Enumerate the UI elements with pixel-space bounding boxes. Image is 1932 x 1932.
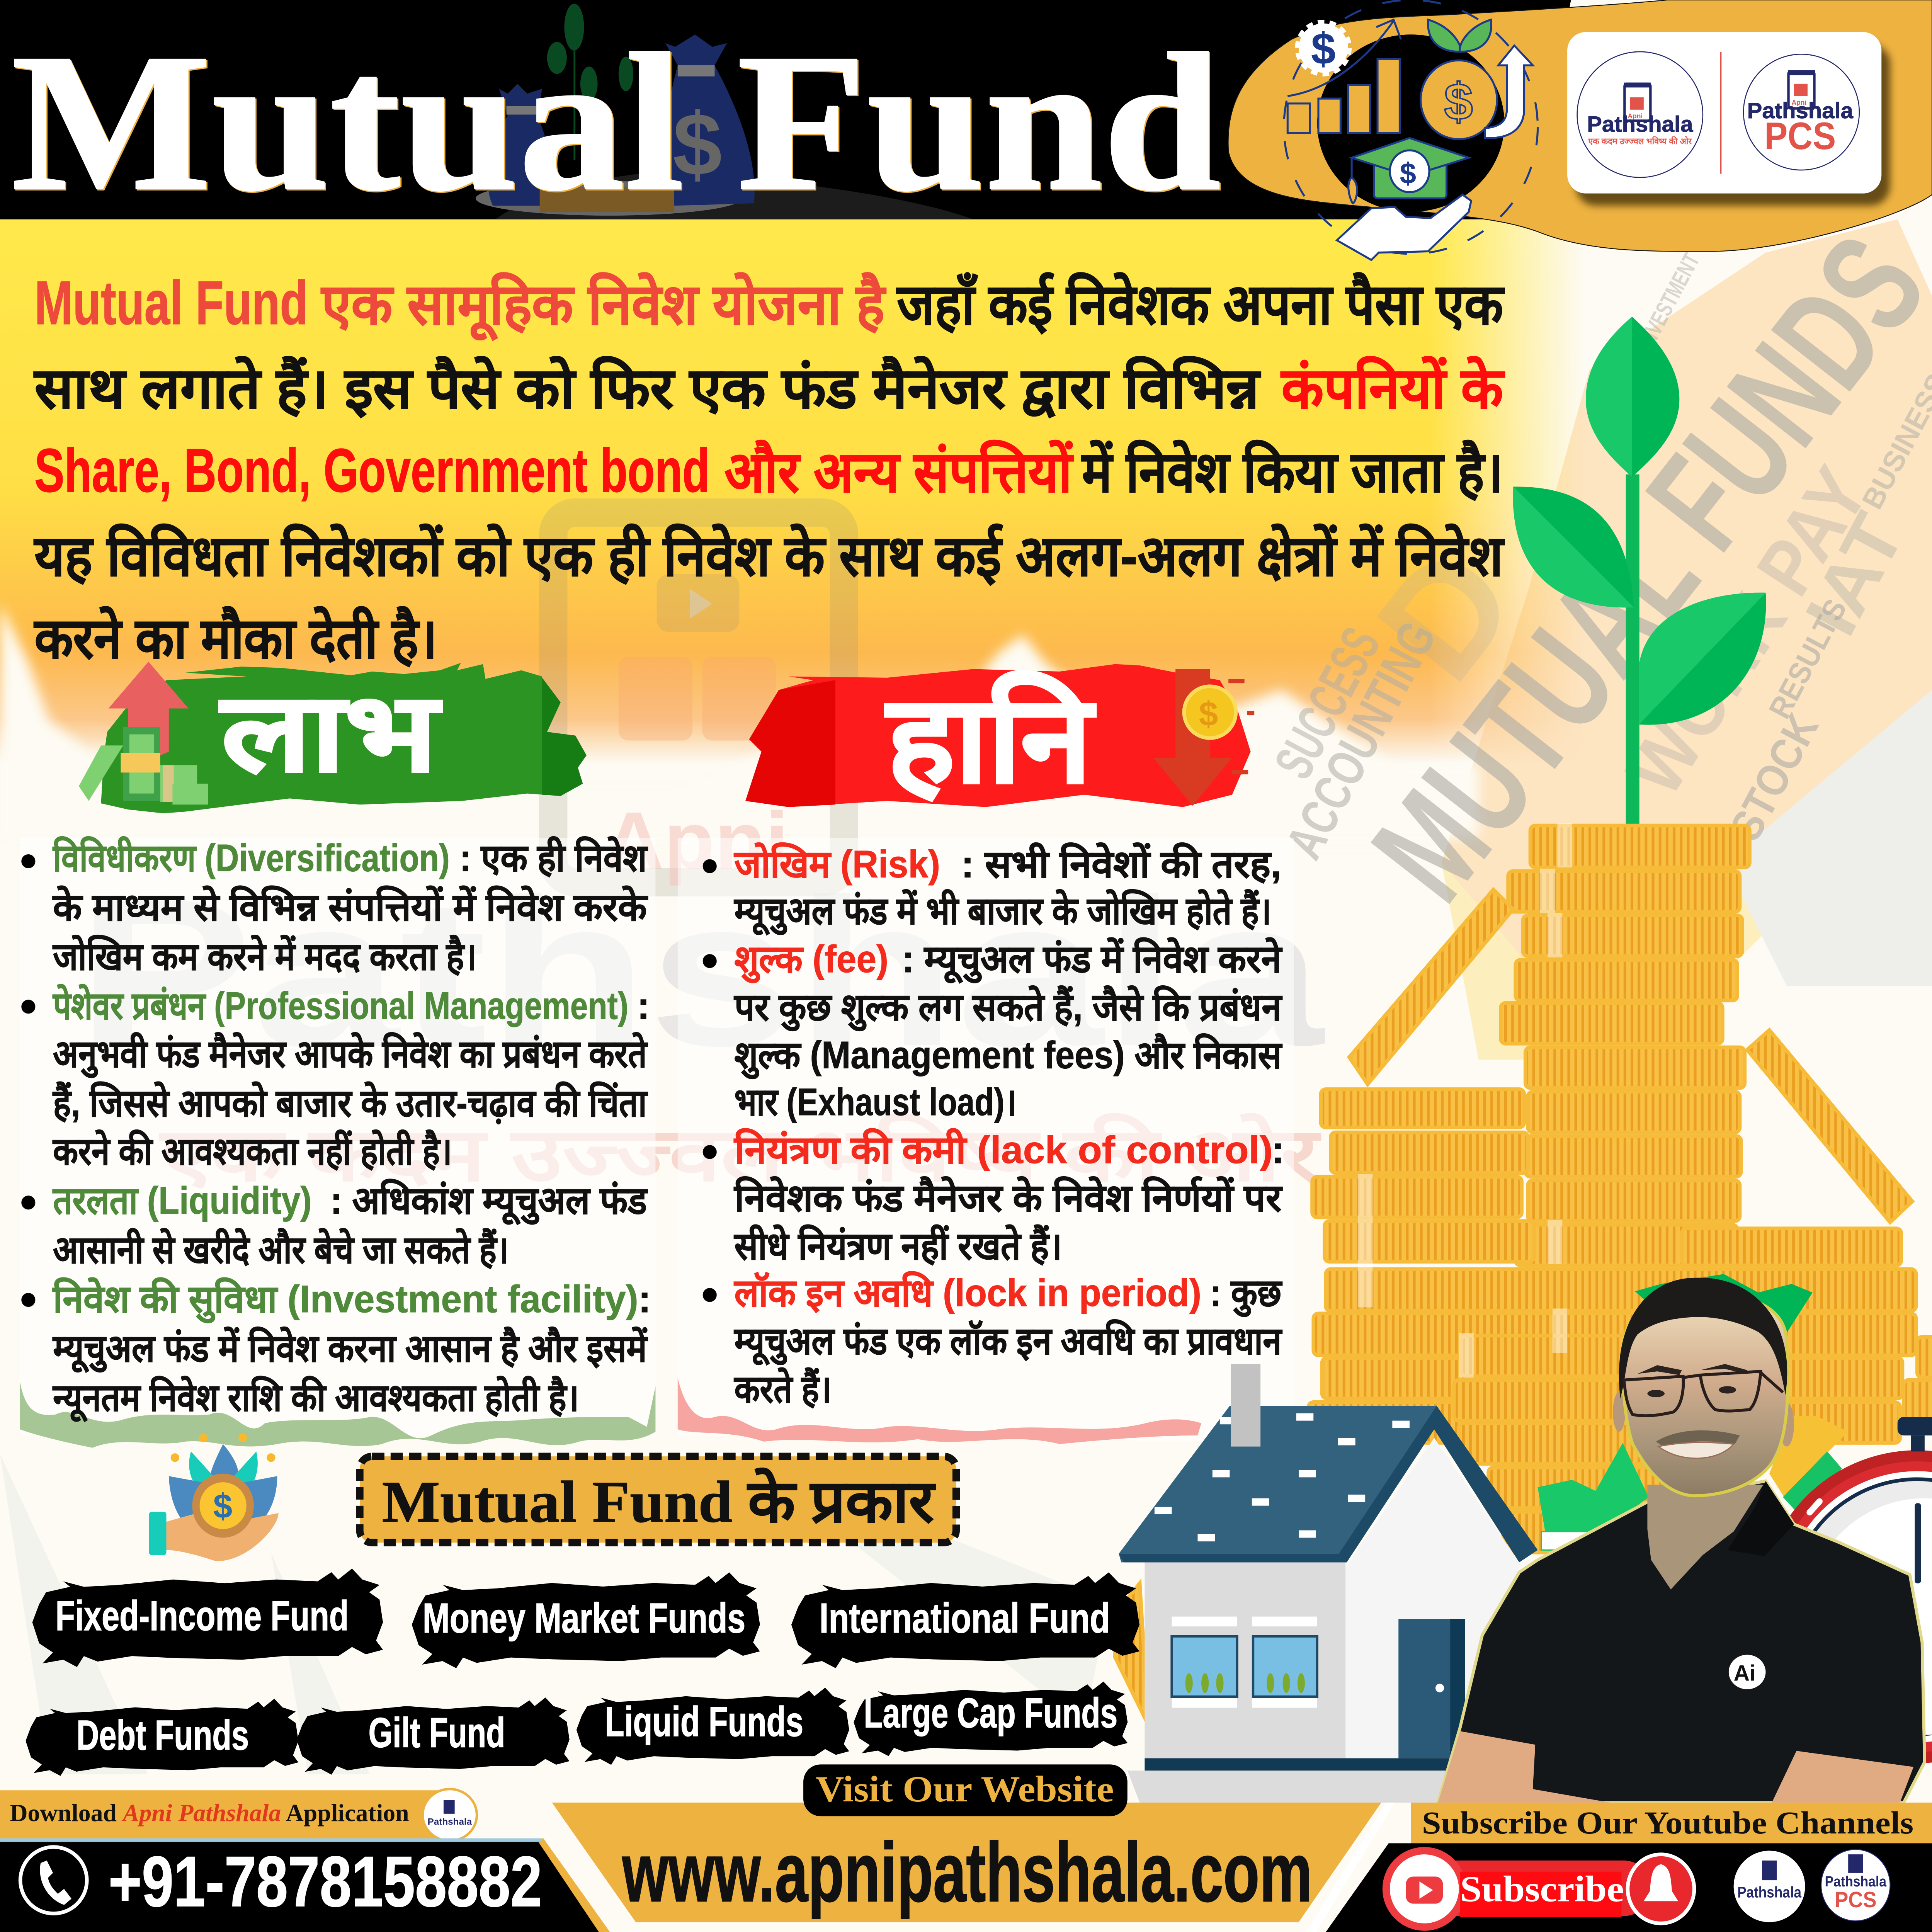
arrow [109,662,189,770]
ears [1613,1392,1794,1447]
gold header blob [1228,0,1932,252]
list: disadvantages: नियंत्रण की कमी (lack of control) [733,1128,1273,1171]
list: disadvantages: भार (Exhaust load)। [735,1081,1017,1123]
list: disadvantages: म्यूचुअल फंड में भी बाजार के जोखिम होते हैं। [734,889,1272,936]
wall [1145,1562,1345,1760]
panel: disadvantages [678,664,1294,1444]
list: disadvantages: लॉक इन अवधि (lock in period) [734,1271,1201,1314]
panel: advantages [20,662,655,1448]
icon: dashed circle [1284,0,1538,254]
logo: Pathshala PCS: PCS [1764,115,1836,157]
leaning coin stack: left [1349,889,1513,1084]
glasses [1624,1371,1783,1416]
icon: bell [1628,1854,1694,1923]
tag: Liquid Funds: Liquid Funds [605,1698,803,1745]
fund type tags [26,1568,1139,1776]
tag: Fixed-Income Fund: Fixed-Income Fund [55,1592,349,1639]
app logo [423,1789,477,1841]
black circle [1317,34,1504,212]
list: disadvantages: करते हैं। [734,1367,832,1410]
list: disadvantages: शुल्क (fee) [735,938,888,983]
roof [1119,1406,1437,1562]
website bar: www.apnipathshala.com [622,1825,1312,1919]
list: advantages: हैं, जिससे आपको बाजार के उतार-चढ़ाव की चिंता [52,1081,648,1124]
intro paragraph: यह विविधता निवेशकों को एक ही निवेश के साथ कई अलग-अलग क्षेत्रों में निवेश [34,524,1505,588]
list: advantages: निवेश की सुविधा (Investment facility) [52,1277,638,1323]
chimney [1231,1364,1260,1447]
collar shadow [1728,1481,1794,1556]
watermark: mutual funds word cloud: STOCK [1721,706,1828,849]
list: advantages: के माध्यम से विभिन्न संपत्तियों में निवेश करके [52,885,648,929]
leaf: right [1639,593,1766,725]
watermark: mutual funds word cloud: ACCOUNTING [1275,612,1447,868]
plant [547,4,633,160]
tag: International Fund [791,1572,1139,1668]
left arm [1438,1731,1611,1803]
logo: Apni Pathshala [1577,52,1703,177]
tag: Gilt Fund [297,1697,570,1775]
icon: gear dollar: $ [1311,24,1336,74]
roof edge [1119,1554,1352,1562]
list: advantages: तरलता (Liquidity) [52,1179,312,1222]
intro paragraph: साथ लगाते हैं। इस पैसे को फिर एक फंड मैनेजर द्वारा विभिन्न [33,356,1261,420]
neck [1647,1485,1763,1590]
moustache [1656,1430,1740,1447]
coin highlights [1358,823,1572,1378]
shirt [1438,1481,1925,1803]
watermark: mutual funds word cloud: WORK PAY [1610,452,1885,810]
tag: Liquid Funds [577,1688,849,1765]
phone bar [0,1838,610,1932]
coins [540,187,674,212]
logo: PCS small: Pathshala [1825,1873,1887,1890]
logo: PCS small [1821,1849,1890,1921]
tag: Large Cap Funds: Large Cap Funds [864,1690,1117,1736]
roof tiles [1155,1413,1410,1541]
watermark: Apni Pathshala logo [77,513,1325,1196]
list: advantages: : एक ही निवेश [459,836,648,879]
stopwatch [1761,1417,1932,1763]
banner: labh [79,662,587,813]
pill: visit our website: Visit Our Website [816,1769,1114,1810]
phone bar: +91-7878158882 [109,1842,542,1922]
arrow [1153,669,1232,806]
tag: Debt Funds [26,1699,298,1776]
coin: $ [1199,694,1218,733]
dollar: $ [673,95,722,194]
list: advantages: पेशेवर प्रबंधन (Professional Management) [52,984,628,1027]
list: disadvantages: निवेशक फंड मैनेजर के निवेश निर्णयों पर [734,1176,1283,1219]
banner: hani [745,664,1254,807]
logo: Apni Pathshala: एक कदम उज्ज्वल भविष्य की ओर [1588,136,1692,146]
list: advantages: म्यूचुअल फंड में निवेश करना आसान है और इसमें [52,1327,648,1373]
icon: graduation cap: $ [1400,157,1416,190]
green bag [1538,1443,1649,1550]
icon: lotus coin in hand [149,1434,279,1561]
leaf: top [1586,317,1679,477]
watermark: mutual funds word cloud: INVESTMENT [1632,249,1705,354]
bullets [703,859,716,1302]
tag: Gilt Fund: Gilt Fund [368,1709,505,1756]
eyebrows [1638,1364,1747,1375]
gold coin stacks [1115,825,1932,1725]
list: disadvantages: : [1272,1129,1284,1171]
intro paragraph: करने का मौका देती है। [34,606,437,670]
list: disadvantages: : सभी निवेशों की तरह, [961,842,1281,885]
dashes [1228,679,1254,774]
subscribe section [1326,1803,1932,1932]
leaning coin stack: behind house [1115,1583,1148,1725]
head [1623,1294,1788,1496]
house [1119,1364,1538,1803]
right arm [1772,1751,1913,1803]
logo: Pathshala PCS: Pathshala [1747,99,1854,123]
base [1145,1758,1466,1770]
label: हानि [885,670,1097,807]
list: advantages: करने की आवश्यकता नहीं होती है। [52,1129,452,1172]
bullets [22,854,35,1307]
intro paragraph: Share, Bond, Government bond [34,436,710,505]
subscribe section: Subscribe Our Youtube Channels [1422,1805,1913,1840]
intro paragraph [33,269,1505,670]
plate shadow [495,171,973,219]
watermark: Apni Pathshala logo: Pathshala [77,855,1325,1089]
tag: Debt Funds: Debt Funds [77,1712,249,1759]
list: disadvantages: म्यूचुअल फंड एक लॉक इन अवधि का प्रावधान [734,1319,1282,1366]
pill: visit our website [803,1764,1128,1816]
download bar [0,1789,477,1841]
money bags and stopwatch behind presenter [1538,1274,1932,1763]
window right [1252,1617,1317,1708]
label: लाभ [220,672,442,793]
panel background [678,838,1294,1442]
list: advantages: : [637,985,650,1027]
list: disadvantages: सीधे नियंत्रण नहीं रखते हैं। [734,1224,1062,1267]
smile [1658,1442,1734,1458]
icon: dollar coin: $ [1444,73,1473,131]
ground shadow [1128,1770,1466,1803]
logo: Apni Pathshala: Apni [1628,112,1643,120]
icon: open hand [1337,195,1471,260]
leaning coin stack: right [1747,1030,1912,1222]
yellow bag [1769,1416,1848,1497]
list: advantages: न्यूनतम निवेश राशि की आवश्यकता होती है। [52,1376,579,1422]
watermark: Apni Pathshala logo: एक कदम उज्ज्वल भविष्य की ओर [159,1113,1321,1196]
list: advantages: : [638,1278,651,1320]
icon: leaves [1428,20,1491,52]
icon: lotus coin in hand: $ [213,1487,232,1526]
list: disadvantages: : म्यूचुअल फंड में निवेश करने [902,937,1282,984]
eyes [1647,1386,1736,1397]
coin [1184,686,1236,738]
money bag illustration behind title [476,4,973,219]
left bag [488,84,551,206]
cash pile [79,727,208,804]
tag: International Fund: International Fund [820,1595,1110,1641]
background: soft rays [0,1454,1466,1803]
divider [1720,52,1721,174]
roof side edge [1338,1406,1538,1562]
heading: types of mutual fund: Mutual Fund के प्रकार [382,1468,936,1535]
list: advantages: जोखिम कम करने में मदद करता है। [52,935,477,978]
logo card [1567,32,1890,206]
logo: PCS small: PCS [1835,1888,1877,1912]
logo: Pathshala PCS: Apni [1791,99,1806,106]
list: advantages: : अधिकांश म्यूचुअल फंड [330,1179,648,1225]
title: Mutual Fund [11,13,1221,231]
intro paragraph: जहाँ कई निवेशक अपना पैसा एक [896,272,1505,337]
tag: Large Cap Funds [854,1682,1128,1756]
list: advantages: अनुभवी फंड मैनेजर आपके निवेश का प्रबंधन करते [53,1032,648,1078]
green bag behind head [1635,1274,1813,1333]
gable wall [1345,1438,1519,1760]
black header band [0,0,1571,219]
intro paragraph: कंपनियों के [1280,356,1505,420]
background: pale flames [0,604,1479,838]
logo: Pathshala small: Pathshala [1737,1884,1802,1901]
icon: graduation cap [1349,138,1469,203]
right bag [665,34,755,206]
logo: Pathshala small [1734,1851,1805,1922]
logo: Pathshala PCS [1743,54,1859,170]
watermark: mutual funds word cloud: SUCCESS [1263,618,1391,788]
logo: Apni Pathshala: Pathshala [1587,112,1693,137]
download bar: Download Apni Pathshala Application [10,1799,409,1827]
website bar [552,1764,1395,1932]
badge: Ai [1734,1661,1756,1685]
app logo: Pathshala [428,1817,472,1827]
plant [1513,317,1766,825]
watermark: mutual funds word cloud: RESULTS [1762,594,1853,724]
intro paragraph: और अन्य संपत्तियों [724,440,1074,504]
heading: types of mutual fund [360,1456,956,1543]
tag: Money Market Funds: Money Market Funds [423,1595,745,1641]
icon: bar chart [1287,59,1400,133]
list: disadvantages: : कुछ [1210,1272,1283,1317]
icon: growth line [1287,20,1401,96]
icon: gear dollar [1299,24,1348,74]
door [1398,1619,1465,1758]
intro paragraph: Mutual Fund [34,269,308,337]
intro paragraph: एक सामूहिक निवेश योजना है [320,272,886,341]
badge [1729,1655,1766,1689]
subscribe button: Subscribe [1460,1868,1624,1909]
icon: dollar coin [1421,60,1497,139]
intro paragraph: में निवेश किया जाता है। [1081,440,1503,504]
list: advantages: आसानी से खरीदे और बेचे जा सकते हैं। [53,1228,509,1271]
subscribe button [1386,1851,1651,1927]
list: disadvantages: शुल्क (Management fees) और निकास [735,1033,1282,1080]
list: disadvantages: पर कुछ शुल्क लग सकते हैं, जैसे कि प्रबंधन [734,985,1282,1031]
stem [1626,474,1639,825]
icon: phone [20,1847,87,1913]
list: advantages: विविधीकरण (Diversification) [52,836,450,879]
finance icon cluster [1284,0,1538,260]
icon: up arrow [1485,46,1533,138]
leaf: left [1513,486,1634,607]
watermark: Apni Pathshala logo: Apni [604,795,789,886]
hair [1619,1278,1787,1398]
window left [1172,1617,1237,1708]
torn red edge [678,1378,1201,1444]
watermark: mutual funds word cloud: D [1344,517,1548,710]
panel background [20,838,655,1435]
torn green edge [20,1380,655,1448]
presenter [1438,1278,1925,1803]
yellow bag lower [1783,1451,1842,1512]
list: disadvantages: जोखिम (Risk) [734,842,940,885]
watermark: mutual funds word cloud: IAT [1789,500,1920,648]
list: disadvantages [703,842,1284,1410]
tag: Money Market Funds [412,1572,760,1668]
tag: Fixed-Income Fund [32,1568,383,1667]
list: advantages [22,836,651,1422]
